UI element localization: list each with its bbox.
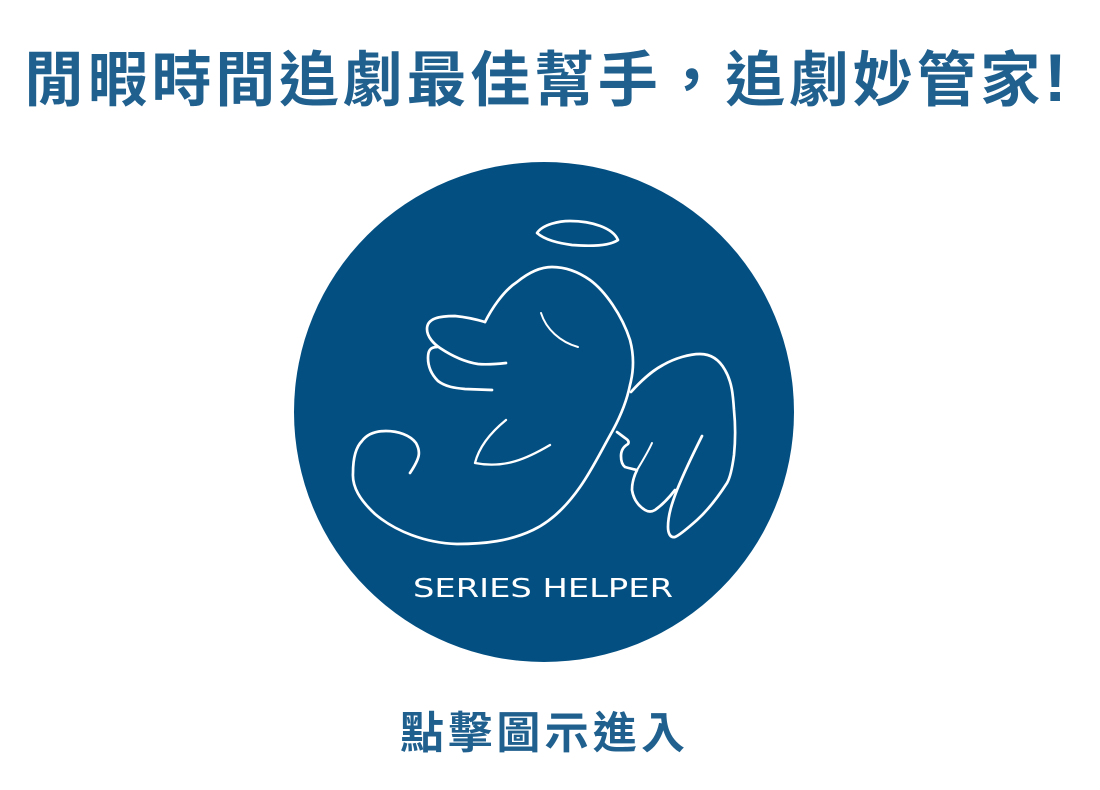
belly mark xyxy=(475,420,550,465)
lower wing arm xyxy=(428,347,492,390)
badge circle xyxy=(294,162,794,662)
body outline xyxy=(353,267,633,544)
upper wing arm xyxy=(427,316,506,364)
call to action: 點擊圖示進入 xyxy=(400,709,689,758)
halo xyxy=(537,221,618,246)
title: 閒暇時間追劇最佳幫手，追劇妙管家! xyxy=(24,40,1067,116)
back wing feathers xyxy=(617,432,675,512)
closed eye xyxy=(541,313,578,347)
feather line xyxy=(637,443,652,470)
logo wordmark: SERIES HELPER xyxy=(413,574,673,604)
back wing xyxy=(631,354,735,537)
icon: angel mascot xyxy=(353,221,735,544)
